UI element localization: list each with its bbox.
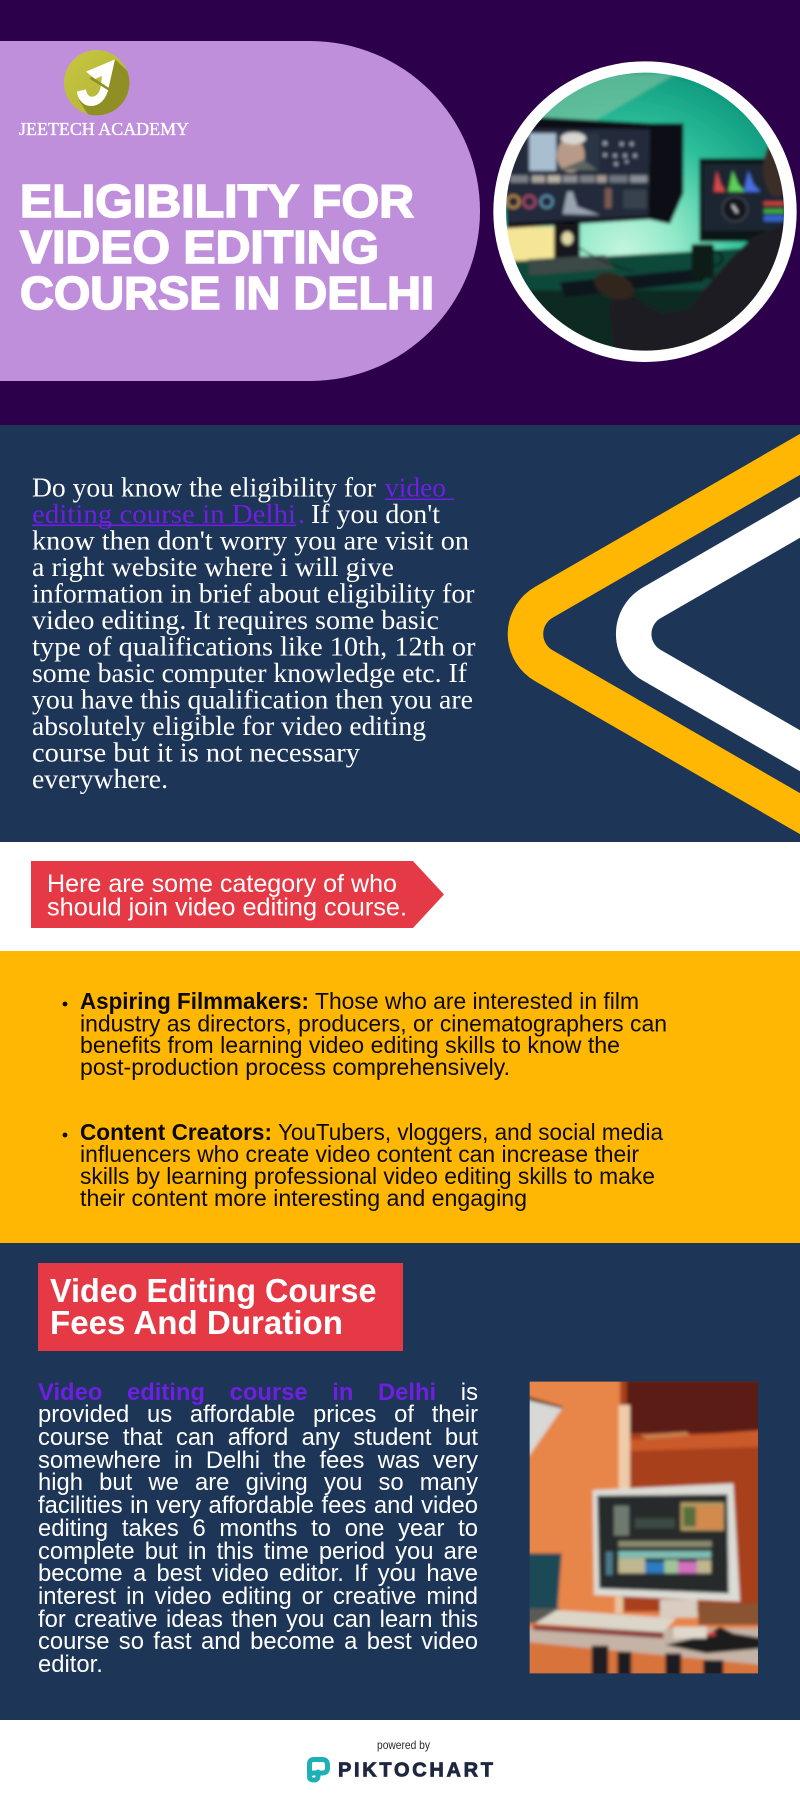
list item: aspiring filmmakers: benefits from learning video editing skills to know the — [80, 1032, 620, 1058]
panel: audience list — [0, 951, 800, 1243]
list item: content creators: their content more interesting and engaging — [80, 1185, 527, 1211]
fees paragraph: provided us affordable prices of their — [38, 1401, 478, 1428]
banner text: Here are some category of who — [47, 870, 397, 898]
fees paragraph: course so fast and become a best video — [38, 1628, 478, 1655]
list item: content creators — [63, 1119, 663, 1211]
heading text: Video Editing Course — [50, 1272, 376, 1309]
intro paragraph: absolutely eligible for video editing — [32, 710, 426, 741]
intro paragraph: video — [385, 471, 446, 502]
list item: content creators: Content Creators: — [80, 1119, 272, 1145]
list item: content creators: influencers who create video content can increase their — [80, 1141, 639, 1167]
fees paragraph: editor. — [38, 1651, 103, 1678]
panel: introduction — [0, 425, 800, 842]
panel: header — [0, 0, 800, 425]
icon: Jeetech logo — [64, 50, 132, 120]
list item: aspiring filmmakers: Those who are interested in film — [315, 988, 639, 1014]
fees paragraph: for creative ideas then you can learn this — [38, 1606, 478, 1633]
banner text — [47, 870, 407, 922]
title — [20, 175, 434, 319]
fees paragraph — [38, 1379, 478, 1678]
intro paragraph: . — [298, 498, 305, 529]
intro paragraph: you have this qualification then you are — [32, 683, 473, 714]
fees paragraph: course that can afford any student but — [38, 1424, 478, 1451]
Piktochart wordmark: PIKTOCHART — [338, 1760, 493, 1782]
list item: aspiring filmmakers: post-production process comprehensively. — [80, 1054, 510, 1080]
list item: aspiring filmmakers: industry as directors, producers, or cinematographers can — [80, 1010, 667, 1036]
list item: content creators: skills by learning professional video editing skills to make — [80, 1163, 655, 1189]
intro paragraph: everywhere. — [32, 763, 168, 794]
title: ELIGIBILITY FOR — [20, 175, 414, 227]
decorative yellow chevron — [525, 437, 800, 831]
intro paragraph: video editing. It requires some basic — [32, 604, 439, 635]
panel: category banner — [0, 842, 800, 951]
panel: footer — [0, 1720, 800, 1802]
fees paragraph: Video editing course in Delhi is — [38, 1379, 478, 1406]
fees paragraph: somewhere in Delhi the fees was very — [38, 1447, 478, 1474]
intro paragraph: course but it is not necessary — [32, 736, 360, 767]
fees paragraph: become a best video editor. If you have — [38, 1560, 478, 1587]
list item: content creators: YouTubers, vloggers, and social media — [278, 1119, 663, 1145]
brand name: JEETECH ACADEMY — [19, 119, 189, 139]
fees paragraph: interest in video editing or creative mind — [38, 1583, 478, 1610]
fees paragraph: high but we are giving you so many — [38, 1469, 478, 1496]
decorative white chevron — [634, 500, 800, 768]
intro paragraph: information in brief about eligibility for — [32, 577, 474, 608]
intro paragraph: a right website where i will give — [32, 551, 394, 582]
powered by label: powered by — [377, 1738, 430, 1752]
intro paragraph: If you don't — [311, 498, 440, 529]
intro paragraph — [32, 471, 476, 794]
icon: Piktochart logo — [310, 1760, 328, 1780]
intro paragraph: know then don't worry you are visit on — [32, 524, 469, 555]
intro paragraph: editing course in Delhi — [32, 498, 296, 529]
panel: fees and duration — [0, 1243, 800, 1720]
intro paragraph: Do you know the eligibility for — [32, 471, 376, 502]
fees paragraph: facilities in very affordable fees and video — [38, 1492, 478, 1519]
red arrow banner — [31, 861, 444, 928]
lilac title shape — [0, 41, 480, 381]
list item: aspiring filmmakers — [63, 988, 667, 1080]
heading text — [50, 1272, 376, 1341]
title: VIDEO EDITING — [20, 221, 379, 273]
banner text: should join video editing course. — [47, 894, 407, 922]
intro paragraph: some basic computer knowledge etc. If — [32, 657, 468, 688]
heading text: Fees And Duration — [50, 1304, 343, 1341]
fees paragraph: complete but in this time period you are — [38, 1538, 478, 1565]
intro paragraph: type of qualifications like 10th, 12th or — [32, 630, 476, 661]
list item: aspiring filmmakers: Aspiring Filmmakers: — [80, 988, 309, 1014]
title: COURSE IN DELHI — [20, 267, 434, 319]
photo: editing desk — [523, 1375, 767, 1678]
red heading box — [38, 1263, 403, 1351]
fees paragraph: editing takes 6 months to one year to — [38, 1515, 478, 1542]
photo: video editor at monitors — [490, 60, 800, 370]
